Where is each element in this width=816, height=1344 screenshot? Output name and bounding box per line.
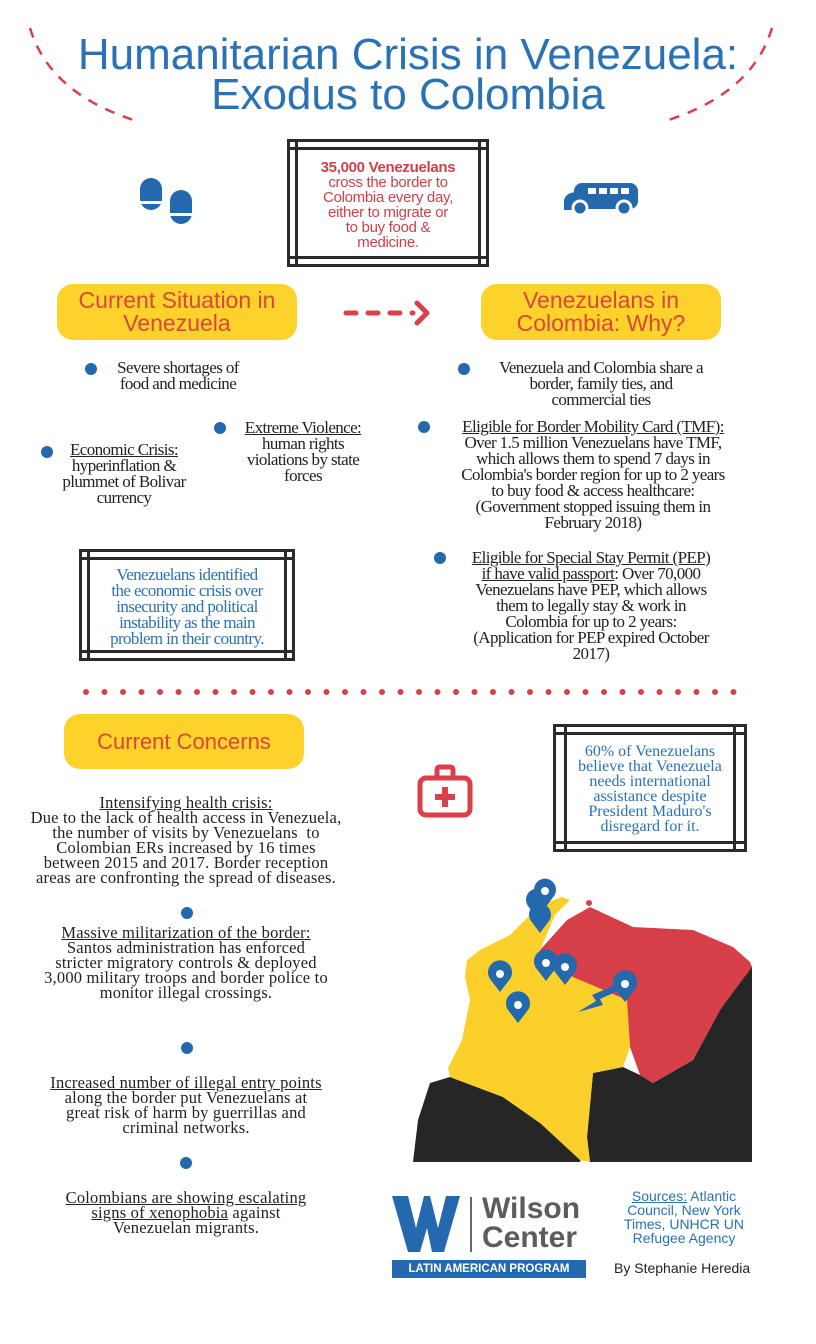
concern: health crisis: areas are confronting the spread of diseases. [36,868,336,887]
heading: Venezuelans in Colombia: Why?: Venezuelans in [523,287,679,313]
byline: By Stephanie Heredia [614,1260,750,1276]
callout: 35,000 Venezuelans [287,139,489,267]
callout: economic crisis main problem: Venezuelans identified [116,565,258,584]
icon: bus [564,183,638,214]
callout: 35,000 Venezuelans: cross the border to [328,174,448,191]
logo: Wilson Center: Wilson [482,1192,580,1225]
concern: militarization [44,923,328,1002]
icon: medical kit [418,764,472,818]
logo: Wilson Center: LATIN AMERICAN PROGRAM [408,1263,570,1275]
callout: 35,000 Venezuelans: 35,000 Venezuelans [321,159,455,176]
title [78,30,738,119]
callout: 60% of Venezuelans: assistance despite [593,788,707,805]
bullet: shortages [85,358,240,393]
bullet: border ties: Venezuela and Colombia share a [499,358,703,377]
callout: economic crisis main problem: insecurity and political [116,597,258,616]
callout: 35,000 Venezuelans: to buy food & [346,219,430,236]
decorative dashed arcs [28,28,774,121]
concern: illegal entry points: along the border put Venezuelans at [65,1088,307,1107]
bullet: TMF: to buy food & access healthcare: [491,481,695,500]
heading: Current Concerns: Current Concerns [97,728,271,754]
logo: Wilson Center [392,1192,586,1278]
callout: 60% of Venezuelans: disregard for it. [600,818,700,835]
callout: 35,000 Venezuelans: medicine. [357,234,419,251]
title: Humanitarian Crisis in Venezuela: [78,30,738,79]
bullet: TMF: Over 1.5 million Venezuelans have TMF, [464,433,722,452]
bullet: PEP: 2017) [573,644,609,663]
concern: xenophobia: Colombians are showing escalating [66,1188,306,1207]
dotted divider [83,689,736,695]
concern: militarization: Santos administration has enforced [67,938,305,957]
bullet: economic crisis: hyperinflation & [72,456,176,475]
concern: xenophobia: signs of xenophobia against [91,1203,281,1222]
concern: xenophobia [66,1188,306,1237]
heading: Current Concerns [64,714,304,769]
callout: 35,000 Venezuelans: either to migrate or [328,204,448,221]
bullet: PEP: if have valid passport: Over 70,000 [482,564,700,583]
bullet: extreme violence: forces [284,466,322,485]
bullet: economic crisis: currency [97,488,151,507]
callout: economic crisis main problem: instability as the main [119,613,255,632]
heading: Venezuelans in Colombia: Why? [481,284,721,340]
bullet: extreme violence [214,418,362,485]
bullet: PEP: Venezuelans have PEP, which allows [475,580,707,599]
concern: militarization: 3,000 military troops and border police to [44,968,328,987]
concern: illegal entry points: criminal networks. [122,1118,250,1137]
concern: health crisis: between 2015 and 2017. Border reception [44,853,328,872]
icon: footprints [140,178,192,224]
callout: economic crisis main problem [79,549,295,661]
bullet: extreme violence: human rights [262,434,344,453]
bullet: PEP: them to legally stay & work in [496,596,686,615]
concern: health crisis [31,793,341,887]
bullet: shortages: Severe shortages of [117,358,239,377]
bullet: border ties: border, family ties, and [529,374,673,393]
sources: Sources: Atlantic Council, New York Times, UNHCR UN Refugee Agency [624,1188,744,1246]
arrow [344,300,430,326]
bullet: border ties [458,358,704,409]
concern: militarization: Massive militarization of the border: [61,923,311,942]
bullet: PEP [434,548,710,663]
bullet: PEP: (Application for PEP expired October [473,628,709,647]
concern: illegal entry points: great risk of harm by guerrillas and [66,1103,306,1122]
callout: 60% of Venezuelans [553,724,747,852]
concern: militarization: monitor illegal crossings. [100,983,272,1002]
heading: Venezuelans in Colombia: Why?: Colombia: Why? [517,310,685,336]
concern: militarization: stricter migratory controls & deployed [55,953,317,972]
bullet: TMF: Eligible for Border Mobility Card (TMF): [462,417,724,436]
title: Exodus to Colombia [211,70,605,119]
bullet: PEP: Eligible for Special Stay Permit (PEP) [472,548,710,567]
callout: 60% of Venezuelans: believe that Venezuela [578,758,722,775]
heading: Current Situation in Venezuela: Venezuela [123,310,231,336]
bullet: TMF: (Government stopped issuing them in [476,497,710,516]
bullet: economic crisis: Economic Crisis: [70,440,178,459]
bullet: TMF: February 2018) [545,513,641,532]
bullet: economic crisis: plummet of Bolivar [62,472,186,491]
bullet: PEP: Colombia for up to 2 years: [505,612,677,631]
concern: health crisis: Intensifying health crisis: [99,793,273,812]
bullet: extreme violence: Extreme Violence: [245,418,361,437]
concern: health crisis: Colombian ERs increased by 16 times [56,838,316,857]
bullet: border ties: commercial ties [551,390,651,409]
callout: 60% of Venezuelans: President Maduro's [588,803,712,820]
concern: illegal entry points [50,1073,322,1137]
callout: 60% of Venezuelans: 60% of Venezuelans [585,743,715,760]
concern: xenophobia: Venezuelan migrants. [113,1218,259,1237]
heading: Current Situation in Venezuela: Current Situation in [79,287,275,313]
bullet: TMF: which allows them to spend 7 days in [476,449,710,468]
bullet: shortages: food and medicine [120,374,236,393]
callout: economic crisis main problem: problem in their country. [110,629,264,648]
concern: health crisis: Due to the lack of health access in Venezuela, [31,808,341,827]
concern: health crisis: the number of visits by Venezuelans to [52,823,320,842]
bullet: economic crisis [41,440,186,507]
heading: Current Situation in Venezuela [57,284,297,340]
callout: economic crisis main problem: the economic crisis over [111,581,263,600]
callout: 60% of Venezuelans: needs international [589,773,711,790]
callout: 35,000 Venezuelans: Colombia every day, [323,189,453,206]
bullet: extreme violence: violations by state [247,450,359,469]
bullet: TMF: Colombia's border region for up to 2 years [461,465,725,484]
bullet: TMF [418,417,725,532]
concern: illegal entry points: Increased number of illegal entry points [50,1073,322,1092]
logo: Wilson Center: Center [482,1221,577,1254]
